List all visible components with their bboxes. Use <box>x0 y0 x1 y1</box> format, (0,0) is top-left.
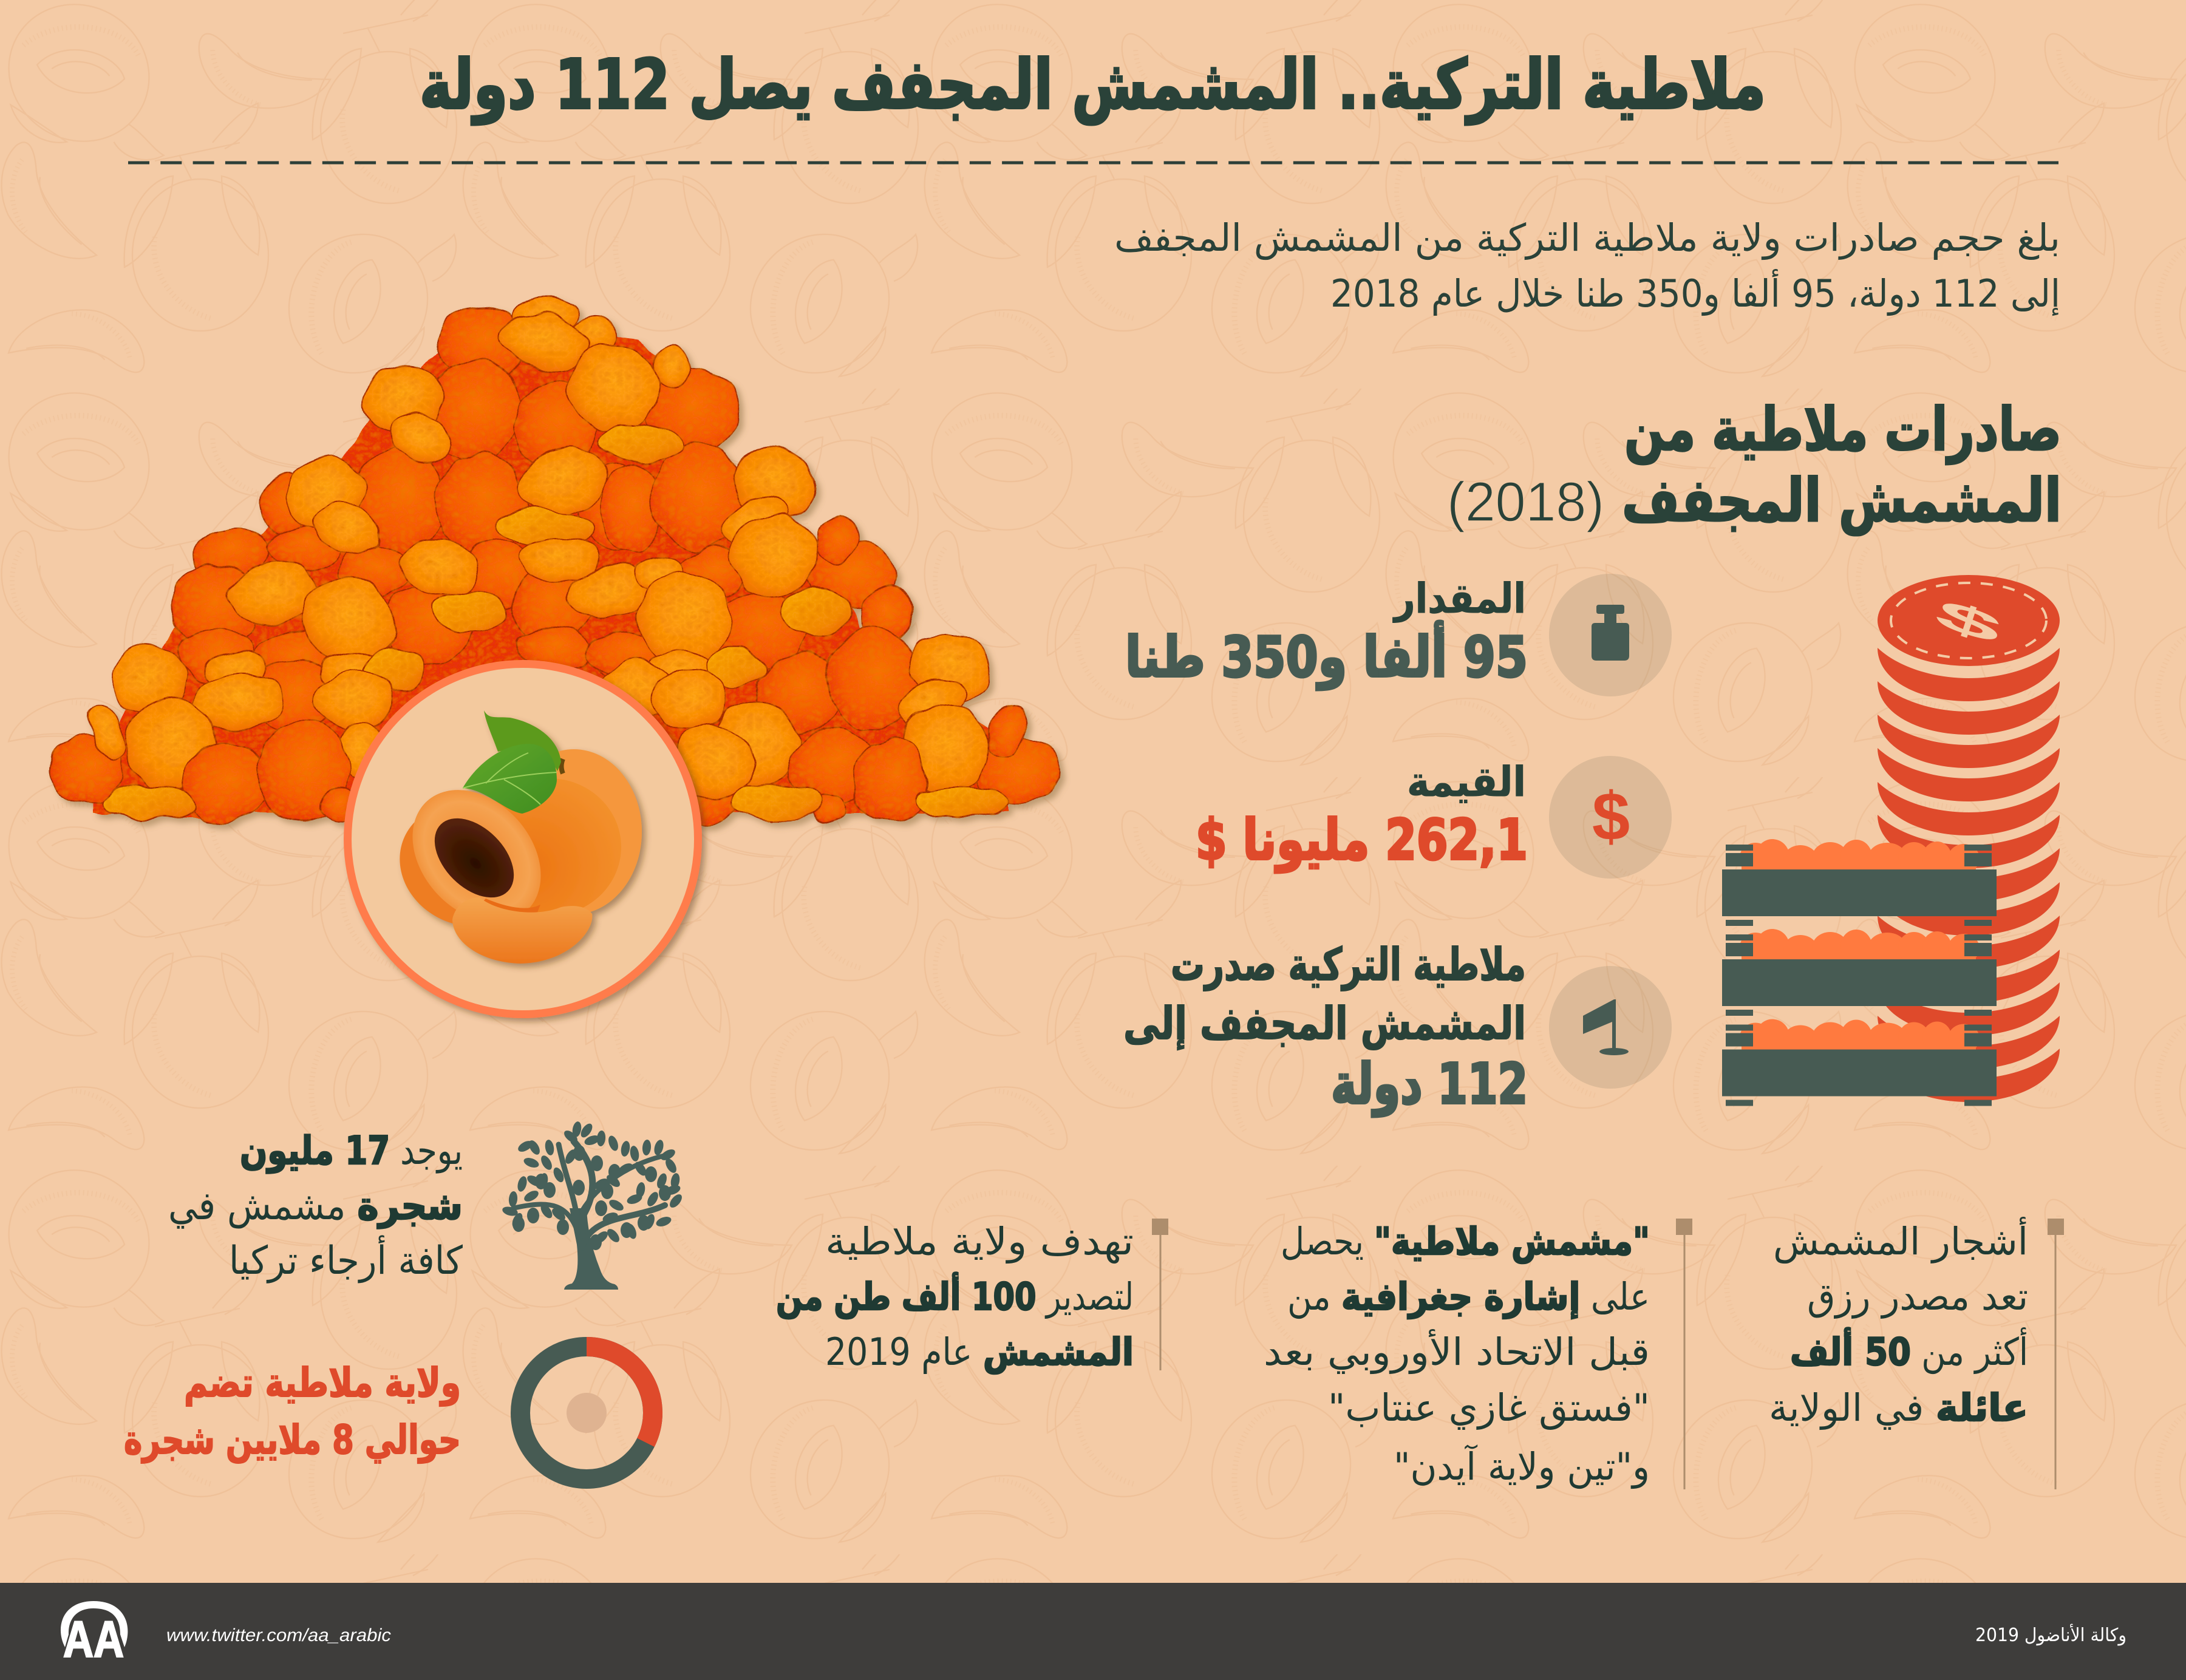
marker <box>2048 1219 2064 1489</box>
fruit cluster <box>512 1145 671 1250</box>
column text <box>776 1219 1134 1374</box>
text: countries <box>1123 939 1528 1117</box>
medallion circle <box>347 664 698 1014</box>
apricot medallion <box>347 664 698 1014</box>
column text: تعد مصدر رزق <box>1807 1274 2028 1319</box>
column text: قبل الاتحاد الأوروبي بعد <box>1264 1328 1650 1374</box>
value: export value: 262,1 مليونا $ <box>1196 808 1528 873</box>
text: countries: المشمش المجفف إلى <box>1123 998 1526 1050</box>
column: families <box>1769 1217 2064 1489</box>
apricot illustration <box>380 710 642 964</box>
icon: dollar: $ <box>1592 778 1630 854</box>
column text: لتصدير 100 ألف طن من <box>776 1272 1134 1319</box>
icon: flag <box>1549 966 1672 1089</box>
text: trees count: شجرة مشمش في <box>168 1184 463 1229</box>
section heading <box>1447 395 2062 536</box>
logo: AA: AA <box>63 1611 124 1668</box>
text: trees count: يوجد 17 مليون <box>240 1129 463 1174</box>
text: countries: ملاطية التركية صدرت <box>1171 939 1526 991</box>
intro paragraph <box>1114 216 2060 316</box>
icon: apricot tree <box>502 1121 684 1290</box>
footer credit: وكالة الأناضول 2019 <box>1975 1623 2126 1646</box>
section heading: المشمش المجفف <box>1622 466 2062 536</box>
stat: value <box>1196 756 1672 879</box>
marker <box>1676 1219 1692 1489</box>
crate middle <box>1722 929 1997 1016</box>
column: geographical indication <box>1264 1219 1692 1489</box>
label: quantity: المقدار <box>1392 575 1526 623</box>
text: trees count <box>168 1129 463 1284</box>
crate bottom <box>1722 1019 1997 1106</box>
text: malatya trees <box>124 1359 461 1464</box>
label: value: القيمة <box>1407 758 1526 806</box>
column text: أشجار المشمش <box>1773 1217 2028 1263</box>
section heading: صادرات ملاطية من <box>1624 395 2062 464</box>
intro paragraph: إلى 112 دولة، 95 ألفا و350 طنا خلال عام 2018 <box>1330 269 2060 316</box>
column text: "مشمش ملاطية" يحصل <box>1281 1219 1650 1263</box>
marker <box>1152 1219 1168 1370</box>
crates of apricots <box>1722 839 1997 1106</box>
title: ملاطية التركية.. المشمش المجفف يصل 112 دولة <box>420 46 1766 125</box>
column text: و"تين ولاية آيدن" <box>1394 1444 1650 1489</box>
text: malatya trees: ولاية ملاطية تضم <box>184 1359 461 1407</box>
column text: "فستق غازي عنتاب" <box>1328 1386 1650 1430</box>
dashed divider <box>128 162 2058 164</box>
coin top: $ <box>1930 590 2007 653</box>
value: quantity: 95 ألفا و350 طنا <box>1125 621 1528 690</box>
column text: تهدف ولاية ملاطية <box>825 1219 1134 1264</box>
column text <box>1769 1217 2028 1430</box>
donut chart <box>520 1347 653 1479</box>
text: countries: 112 دولة <box>1331 1052 1528 1117</box>
crate top <box>1722 839 1997 926</box>
column: export target <box>776 1219 1168 1374</box>
footer link: www.twitter.com/aa_arabic <box>166 1625 391 1645</box>
coin stack <box>1878 575 2060 1102</box>
icon: dollar <box>1549 756 1672 879</box>
column text: أكثر من 50 ألف <box>1790 1327 2028 1374</box>
column text <box>1264 1219 1650 1489</box>
section heading: (2018) <box>1447 471 1604 533</box>
text: trees count: كافة أرجاء تركيا <box>229 1235 463 1284</box>
footer bar <box>0 1583 2186 1680</box>
intro paragraph: بلغ حجم صادرات ولاية ملاطية التركية من المشمش المجفف <box>1114 216 2060 260</box>
column text: على إشارة جغرافية من <box>1287 1274 1650 1319</box>
icon: weight <box>1549 574 1672 696</box>
stat: countries <box>1123 939 1672 1117</box>
column text: المشمش عام 2019 <box>825 1330 1134 1374</box>
dried apricot pile <box>49 299 1060 824</box>
column text: عائلة في الولاية <box>1769 1386 2028 1430</box>
stat: quantity <box>1125 574 1672 696</box>
coin top <box>1878 575 2060 666</box>
text: malatya trees: حوالي 8 ملايين شجرة <box>124 1416 461 1464</box>
